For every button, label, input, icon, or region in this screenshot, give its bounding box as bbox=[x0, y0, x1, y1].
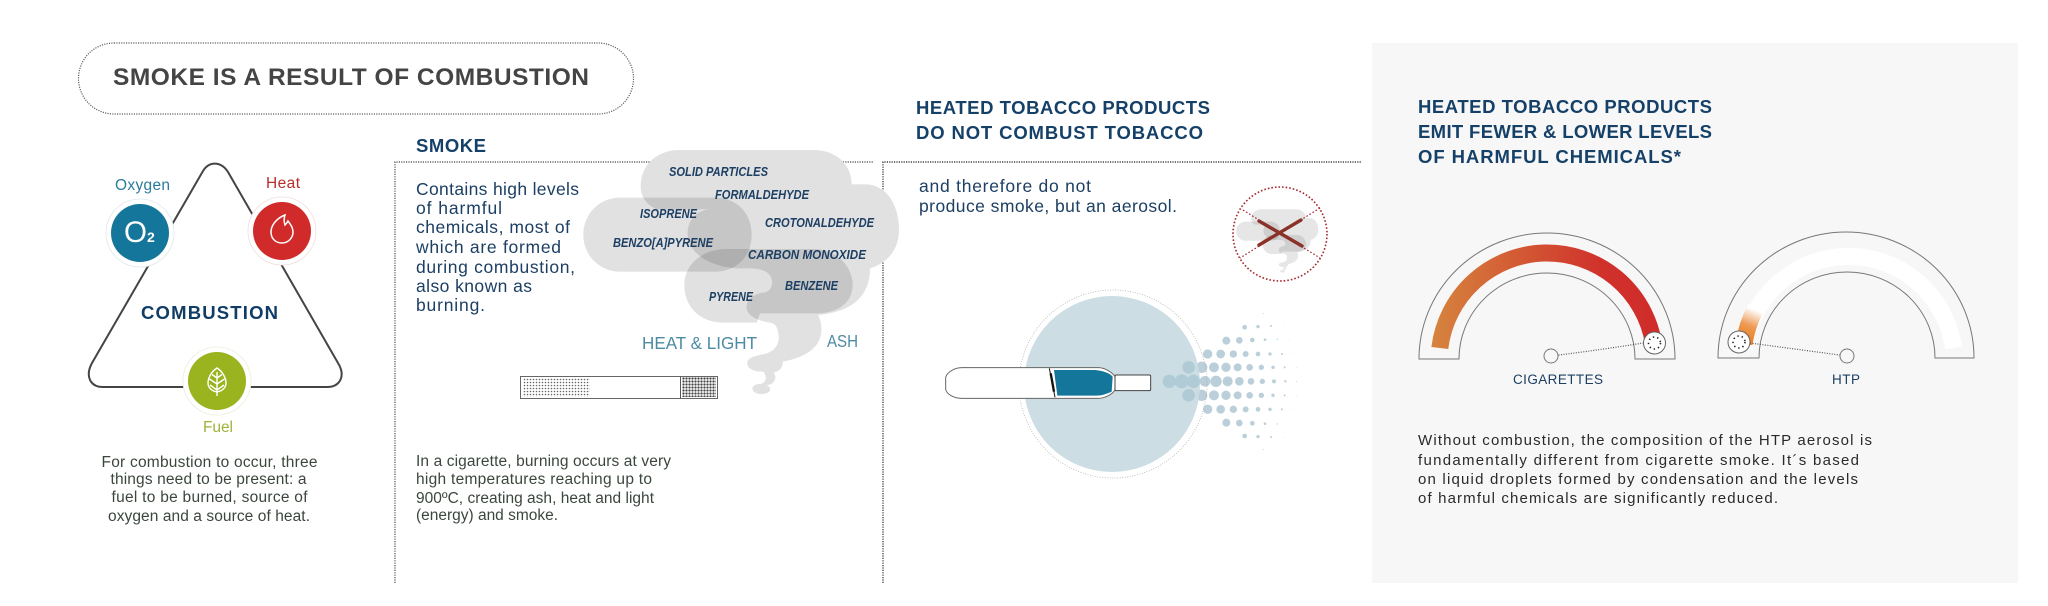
label oxygen: Oxygen bbox=[115, 177, 170, 194]
icon: no smoke bbox=[1233, 187, 1327, 281]
chemical labels bbox=[613, 164, 874, 304]
aerosol text block: and therefore do not bbox=[919, 176, 1091, 196]
combustion text block: oxygen and a source of heat. bbox=[108, 508, 310, 525]
halo circle bbox=[1024, 296, 1200, 472]
smoke text block: chemicals, most of bbox=[416, 217, 570, 237]
heated tobacco heading bbox=[916, 97, 1210, 143]
text block: Without combustion, the composition of the HTP aerosol is bbox=[1418, 432, 1872, 449]
combustion text block: fuel to be burned, source of bbox=[112, 489, 308, 506]
mouthpiece bbox=[1115, 375, 1151, 391]
aerosol text block: produce smoke, but an aerosol. bbox=[919, 196, 1177, 216]
smoke text block: burning. bbox=[416, 295, 485, 315]
smoke text block: which are formed bbox=[415, 237, 561, 257]
heated tobacco heading: HEATED TOBACCO PRODUCTS bbox=[916, 97, 1210, 118]
heat and light label: HEAT & LIGHT bbox=[642, 333, 757, 353]
heater blade bbox=[1049, 368, 1055, 397]
cigarette text block bbox=[416, 453, 671, 524]
cigarette text block: In a cigarette, burning occurs at very bbox=[416, 453, 671, 470]
label heat: Heat bbox=[266, 175, 301, 192]
aerosol text block bbox=[919, 176, 1177, 216]
ash label: ASH bbox=[827, 331, 858, 351]
smoke text block: Contains high levels bbox=[416, 179, 579, 199]
panel: reduced chemicals bbox=[1372, 43, 2018, 583]
panel: smoke frame bbox=[395, 162, 873, 583]
combustion text block: For combustion to occur, three bbox=[102, 454, 318, 471]
oxygen circle icon: O bbox=[124, 216, 147, 249]
text block: on liquid droplets formed by condensation and the levels bbox=[1418, 471, 1858, 488]
panel: combustion triangle bbox=[89, 164, 342, 436]
combustion text block: things need to be present: a bbox=[110, 471, 307, 488]
smoke text block: during combustion, bbox=[416, 257, 575, 277]
aerosol dots bbox=[1163, 313, 1297, 450]
chemical labels: BENZO[A]PYRENE bbox=[613, 235, 713, 250]
heat circle icon bbox=[248, 197, 316, 265]
chemical labels: PYRENE bbox=[709, 289, 753, 304]
cigarette text block: high temperatures reaching up to bbox=[416, 471, 652, 488]
text block bbox=[1418, 432, 1872, 507]
chemical labels: CARBON MONOXIDE bbox=[748, 247, 866, 262]
label combustion: COMBUSTION bbox=[141, 302, 278, 323]
icon: cigarette bbox=[520, 376, 718, 398]
label HTP: HTP bbox=[1832, 372, 1860, 387]
heading: EMIT FEWER & LOWER LEVELS bbox=[1418, 121, 1712, 142]
chemical labels: FORMALDEHYDE bbox=[715, 187, 809, 202]
smoke cloud bbox=[583, 150, 899, 394]
triangle outline bbox=[89, 164, 342, 387]
heading: OF HARMFUL CHEMICALS* bbox=[1418, 146, 1682, 167]
panel: aerosol frame bbox=[883, 162, 1361, 583]
text block: fundamentally different from cigarette smoke. It´s based bbox=[1418, 452, 1859, 469]
heated tobacco heading: DO NOT COMBUST TOBACCO bbox=[916, 122, 1203, 143]
heated tobacco device illustration bbox=[946, 290, 1297, 478]
combustion text block bbox=[102, 454, 318, 525]
title pill: SMOKE IS A RESULT OF COMBUSTION bbox=[113, 64, 589, 91]
gauge: cigarettes bbox=[1419, 233, 1675, 363]
tobacco plug bbox=[1054, 370, 1113, 396]
aerosol dots over halo bbox=[1163, 361, 1200, 402]
chemical labels: SOLID PARTICLES bbox=[669, 164, 768, 179]
heading: HEATED TOBACCO PRODUCTS bbox=[1418, 96, 1712, 117]
cigarette text block: (energy) and smoke. bbox=[416, 507, 558, 524]
label cigarettes: CIGARETTES bbox=[1513, 372, 1603, 387]
label fuel: Fuel bbox=[203, 419, 233, 436]
cigarette text block: 900ºC, creating ash, heat and light bbox=[416, 490, 655, 507]
heading bbox=[1418, 96, 1712, 167]
smoke heading: SMOKE bbox=[416, 135, 486, 156]
smoke text block bbox=[415, 179, 579, 315]
text block: of harmful chemicals are significantly reduced. bbox=[1418, 490, 1778, 507]
chemical labels: ISOPRENE bbox=[640, 206, 697, 221]
oxygen circle icon bbox=[106, 199, 174, 267]
title pill bbox=[78, 43, 634, 114]
smoke text block: also known as bbox=[416, 276, 532, 296]
device body bbox=[946, 368, 1115, 398]
oxygen circle icon: 2 bbox=[147, 229, 155, 245]
chemical labels: CROTONALDEHYDE bbox=[765, 215, 874, 230]
chemical labels: BENZENE bbox=[785, 278, 838, 293]
smoke text block: of harmful bbox=[416, 198, 502, 218]
gauge: HTP bbox=[1718, 232, 1974, 363]
fuel circle icon bbox=[183, 347, 251, 415]
